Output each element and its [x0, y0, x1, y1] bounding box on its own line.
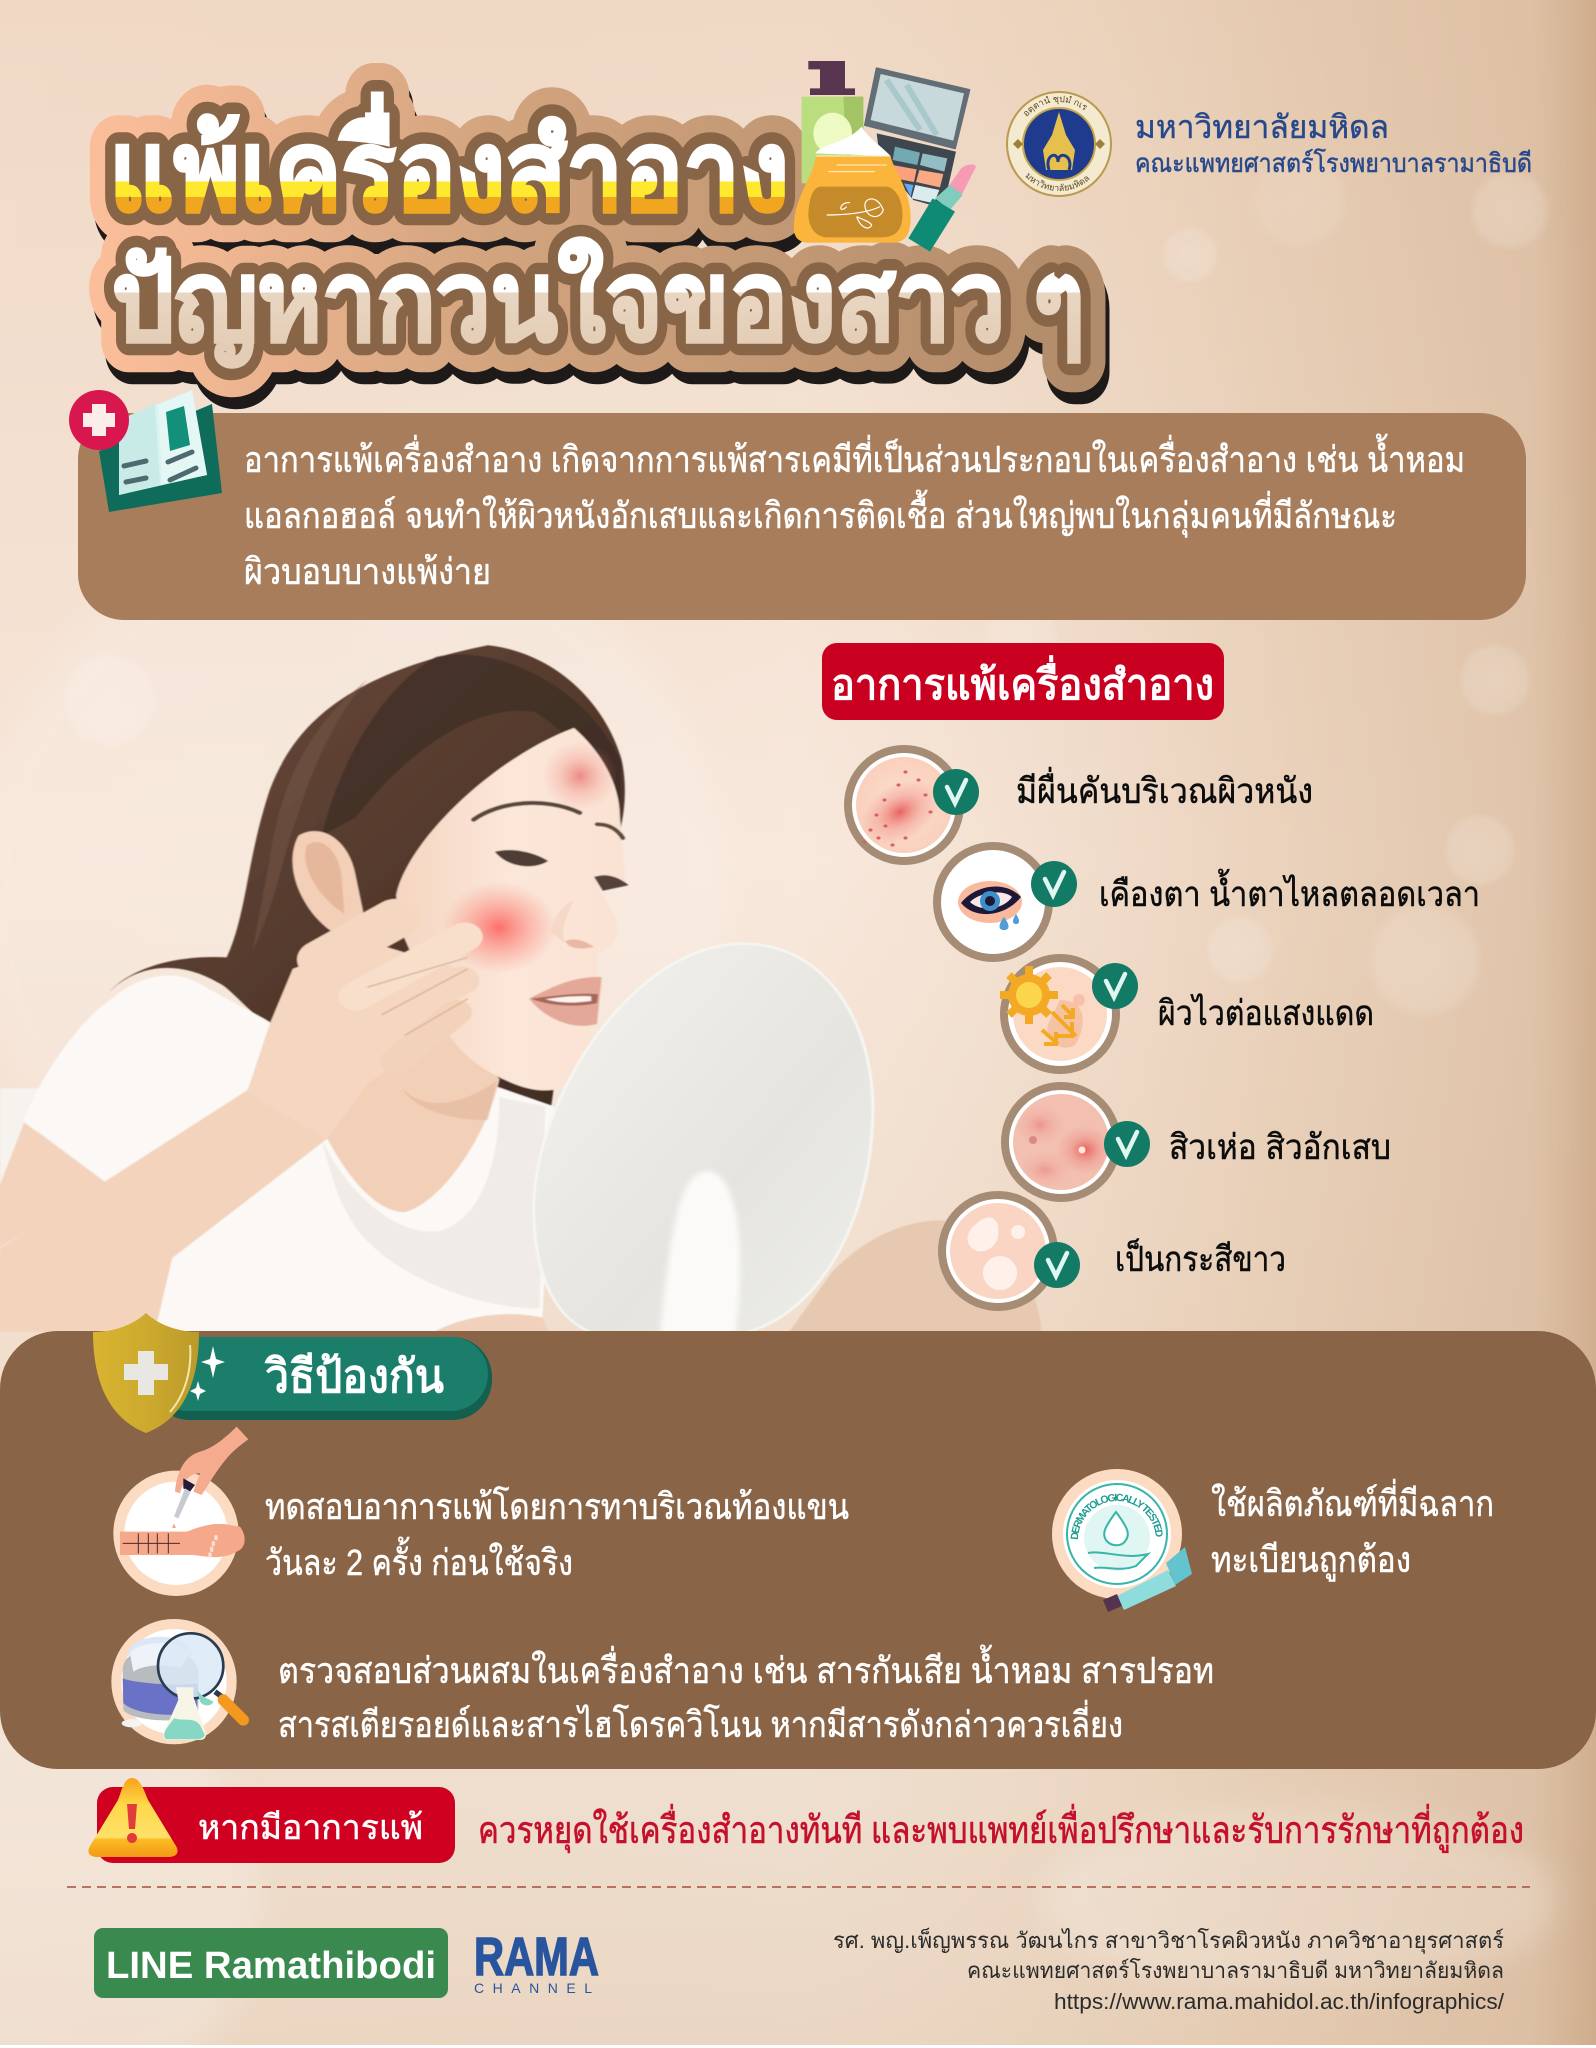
logo: RAMA Channel: CHANNEL	[474, 1980, 592, 1996]
prevention item 3 text	[278, 1644, 1214, 1745]
icon: warning triangle	[88, 1778, 178, 1857]
heading: symptoms: อาการแพ้เครื่องสำอาง	[831, 655, 1214, 708]
hair	[109, 645, 625, 1107]
lighter hair strand	[253, 680, 367, 950]
title shadow layer: ปัญหากวนใจของสาว ๆ	[116, 250, 1089, 380]
symptom 1: rash	[848, 749, 1313, 861]
logo: RAMA Channel	[474, 1927, 599, 1996]
red cross badge	[69, 390, 129, 450]
finger gap shadows	[367, 957, 468, 1035]
prevention item 3 icon: ingredient check	[111, 1619, 243, 1744]
prevention item 1 text: ทดสอบอาการแพ้โดยการทาบริเวณท้องแขน	[265, 1486, 849, 1527]
palm	[247, 941, 459, 1139]
face	[396, 728, 626, 1090]
forehead rash	[542, 742, 617, 810]
prevention item 2 text: ทะเบียนถูกต้อง	[1211, 1539, 1411, 1582]
panel: intro	[78, 413, 1526, 620]
finger 4	[396, 1012, 456, 1061]
prevention heading pill	[150, 1337, 492, 1420]
title outer outline: แพ้เครื่องสำอาง	[109, 92, 789, 234]
mirror	[534, 944, 873, 1336]
title inner outline: ปัญหากวนใจของสาว ๆ	[112, 238, 1085, 368]
logo: Mahidol University seal: อตฺตานํ ชุปมํ กเร	[1024, 96, 1088, 116]
prevention item 2 text: ใช้ผลิตภัณฑ์ที่มีฉลาก	[1211, 1479, 1494, 1524]
eyeshadow palette	[865, 68, 969, 208]
near hand on table	[428, 1314, 551, 1336]
heading: symptoms	[822, 643, 1224, 720]
title shadow layer	[113, 104, 1089, 380]
sun	[1000, 966, 1058, 1024]
faculty name: คณะแพทยศาสตร์โรงพยาบาลรามาธิบดี	[1135, 148, 1532, 178]
mirror stand	[660, 1171, 740, 1336]
prevention item 3 text: สารสเตียรอยด์และสารไฮโดรควิโนน หากมีสารดังกล่าวควรเลี่ยง	[278, 1700, 1123, 1745]
finger 1	[321, 918, 396, 960]
symptom label: ผิวไวต่อแสงแดด	[1158, 993, 1374, 1033]
hand with dropper	[172, 1427, 248, 1528]
finger 2	[356, 937, 465, 996]
prevention item 1 text	[265, 1486, 849, 1583]
panel: prevention	[0, 1313, 1596, 1769]
check badge	[1092, 963, 1138, 1009]
upper arm	[0, 1123, 109, 1247]
prevention item 1 text: วันละ 2 ครั้ง ก่อนใช้จริง	[265, 1536, 573, 1583]
icon: cosmetics	[794, 61, 976, 252]
credits	[833, 1926, 1505, 2014]
warning label	[97, 1787, 455, 1863]
ear	[293, 831, 367, 932]
symptom label: เป็นกระสีขาว	[1115, 1238, 1286, 1279]
title shadow layer: แพ้เครื่องสำอาง	[113, 104, 793, 246]
credits: คณะแพทยศาสตร์โรงพยาบาลรามาธิบดี มหาวิทยาลัยมหิดล	[967, 1958, 1504, 1983]
neck	[327, 1015, 499, 1212]
logo: Mahidol University seal	[1006, 91, 1112, 197]
shirt	[23, 976, 554, 1331]
pump bottle	[802, 61, 863, 183]
check badge	[1104, 1121, 1150, 1167]
symptom 4: acne	[1005, 1086, 1391, 1198]
brow	[474, 803, 580, 820]
credits: https://www.rama.mahidol.ac.th/infographics/	[1054, 1989, 1505, 2014]
arm with grid	[120, 1524, 245, 1557]
title line 2: ปัญหากวนใจของสาว ๆ	[112, 238, 1085, 368]
check badge	[933, 769, 979, 815]
symptom 3: sun sensitivity	[1000, 958, 1374, 1070]
flask	[163, 1687, 206, 1740]
symptom label: มีผื่นคันบริเวณผิวหนัง	[1016, 767, 1313, 811]
badge: LINE Ramathibodi	[94, 1928, 448, 1998]
warning label: หากมีอาการแพ้	[198, 1809, 423, 1847]
title outer outline: ปัญหากวนใจของสาว ๆ	[112, 238, 1085, 368]
magnifier	[158, 1633, 243, 1720]
sofa behind woman	[0, 1088, 40, 1189]
icon: medical book	[69, 390, 222, 512]
logo: RAMA Channel: RAMA	[474, 1927, 599, 1987]
forearm	[0, 1061, 367, 1331]
prevention item 2 icon: dermatologically tested: DERMATOLOGICALLY TESTED	[1070, 1494, 1163, 1540]
prevention item 3 text: ตรวจสอบส่วนผสมในเครื่องสำอาง เช่น สารกันเสีย น้ำหอม สารปรอท	[278, 1644, 1214, 1691]
prevention item 2 text	[1211, 1479, 1494, 1582]
university name: มหาวิทยาลัยมหิดล	[1135, 109, 1389, 145]
symptom 5: white patches	[942, 1195, 1286, 1307]
lipstick	[908, 164, 976, 252]
title outer outline	[109, 92, 1085, 368]
shirt shadow	[321, 1097, 545, 1308]
cream jar	[794, 127, 911, 243]
title inner outline: แพ้เครื่องสำอาง	[109, 92, 789, 234]
title	[109, 92, 1089, 380]
far arm behind mirror	[786, 1220, 1042, 1336]
check badge	[1034, 1242, 1080, 1288]
title inner outline	[109, 92, 1085, 368]
symptom label: เคืองตา น้ำตาไหลตลอดเวลา	[1099, 868, 1480, 914]
icon: shield	[93, 1313, 199, 1433]
lips	[529, 977, 602, 1026]
nose shadow	[565, 939, 594, 949]
symptom 2: watery eye	[937, 846, 1480, 958]
credits: รศ. พญ.เพ็ญพรรณ วัฒนไกร สาขาวิชาโรคผิวหนัง ภาควิชาอายุรศาสตร์	[833, 1926, 1504, 1954]
cream jar	[122, 1637, 198, 1727]
tube	[1117, 1570, 1176, 1610]
title line 1: แพ้เครื่องสำอาง	[109, 92, 789, 234]
finger 3	[373, 980, 462, 1029]
symptom label: สิวเห่อ สิวอักเสบ	[1169, 1128, 1391, 1167]
prevention item 1 icon: patch test	[113, 1427, 248, 1596]
dark hair crown	[321, 654, 621, 836]
prevention heading pill: วิธีป้องกัน	[264, 1350, 445, 1402]
cheek rash	[442, 882, 557, 973]
eye	[495, 850, 548, 866]
intro text: ผิวบอบบางแพ้ง่าย	[244, 551, 491, 592]
badge: LINE Ramathibodi: LINE Ramathibodi	[106, 1945, 436, 1987]
check badge	[1031, 861, 1077, 907]
photo: woman looking in mirror	[0, 645, 1042, 1336]
intro text: แอลกอฮอล์ จนทำให้ผิวหนังอักเสบและเกิดการติดเชื้อ ส่วนใหญ่พบในกลุ่มคนที่มีลักษณะ	[244, 489, 1397, 538]
prevention item 2 icon: dermatologically tested	[1052, 1469, 1192, 1612]
intro text	[244, 433, 1465, 592]
logo: Mahidol University seal: มหาวิทยาลัยมหิดล	[1026, 173, 1090, 192]
